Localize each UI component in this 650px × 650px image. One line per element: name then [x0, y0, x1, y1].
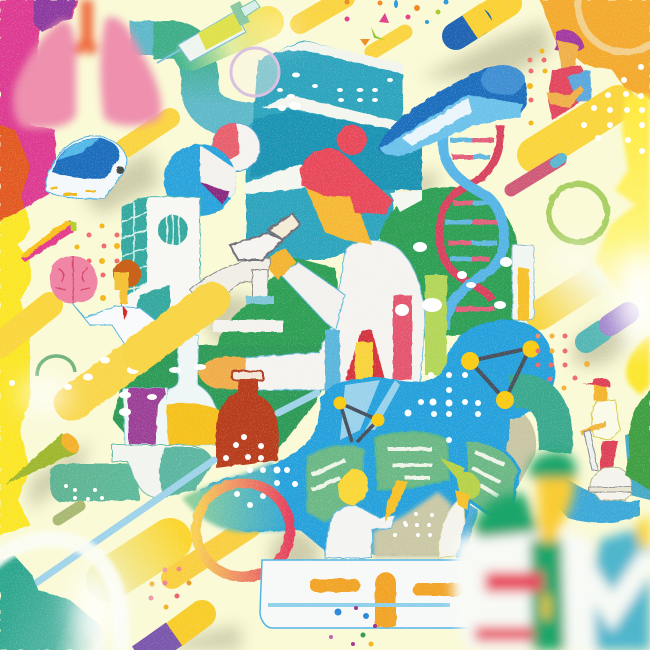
test tube [512, 245, 534, 320]
blue landscape [200, 320, 555, 555]
left dots [74, 224, 120, 301]
nurse [546, 30, 592, 120]
doctor with brain [50, 256, 155, 345]
small green arc [37, 356, 75, 376]
capsule bottom [140, 614, 202, 650]
molecule left [334, 396, 384, 442]
dots near segway [536, 334, 590, 390]
beige ground [373, 492, 452, 558]
red ring [196, 483, 290, 577]
tubes in front of scientist [325, 275, 447, 392]
car [45, 136, 127, 199]
small pie chart [212, 123, 260, 171]
hospital building [122, 196, 200, 325]
brain [50, 256, 97, 303]
woman at screen [325, 470, 408, 558]
lab coat [245, 240, 425, 390]
fade on blue landscape [182, 462, 290, 532]
flask [152, 335, 219, 445]
hand [263, 248, 296, 280]
face and neck [306, 188, 372, 245]
pale ring [231, 48, 279, 96]
confetti under panel [329, 606, 377, 646]
teal pipe [130, 38, 262, 122]
blurred foreground person [453, 452, 650, 650]
white strip right of building [390, 190, 422, 212]
white control panel [260, 560, 472, 628]
building window dots [277, 72, 393, 111]
teal strip behind rider [625, 430, 650, 500]
purple beaker [123, 388, 168, 445]
big yellow pill [72, 300, 212, 403]
lavender capsule [586, 313, 628, 342]
syringe blob [190, 22, 268, 55]
yellow and magenta stick [21, 220, 76, 262]
segway rider [580, 378, 632, 500]
top left colour blobs [0, 0, 78, 535]
molecule right [461, 340, 540, 409]
DNA helix [439, 125, 504, 330]
mortar and pestle bar [50, 445, 213, 502]
man at screen [438, 458, 481, 558]
brown bottle [216, 371, 279, 468]
syringe [157, 0, 260, 63]
stripes on landscape [340, 380, 400, 440]
white ring bottom left [0, 539, 122, 650]
top right capsule [456, 3, 508, 36]
beige arch inner [490, 415, 536, 510]
dots lower [148, 566, 192, 610]
sun top right [540, 0, 650, 100]
green cone [5, 430, 82, 485]
big yellow capsule fading [108, 540, 170, 580]
red tube [511, 158, 562, 190]
glass rod [36, 393, 317, 583]
green ring [549, 184, 607, 242]
nurse dots [527, 48, 548, 126]
green hills behind scientist [113, 187, 518, 450]
hair [300, 148, 393, 214]
lung blurred foreground [13, 0, 161, 129]
teal arch [512, 391, 556, 452]
white sparkle dots [9, 64, 645, 501]
green teal blob bottom left [0, 555, 105, 650]
light blue band right [555, 478, 640, 523]
small olive capsule [58, 506, 80, 520]
teal building [246, 40, 422, 260]
right green bush [625, 390, 650, 490]
large pie chart [164, 144, 236, 216]
landscape dots [234, 372, 481, 537]
confetti top [344, 0, 448, 46]
right yellow edge [595, 95, 650, 310]
microscope [190, 213, 300, 332]
green screens [307, 432, 519, 522]
re-drawn big pill over doctor [140, 300, 212, 353]
scientist [198, 125, 425, 390]
bullet train [378, 65, 527, 156]
orange wedge [262, 560, 291, 610]
right yellow strip lower [626, 335, 650, 395]
